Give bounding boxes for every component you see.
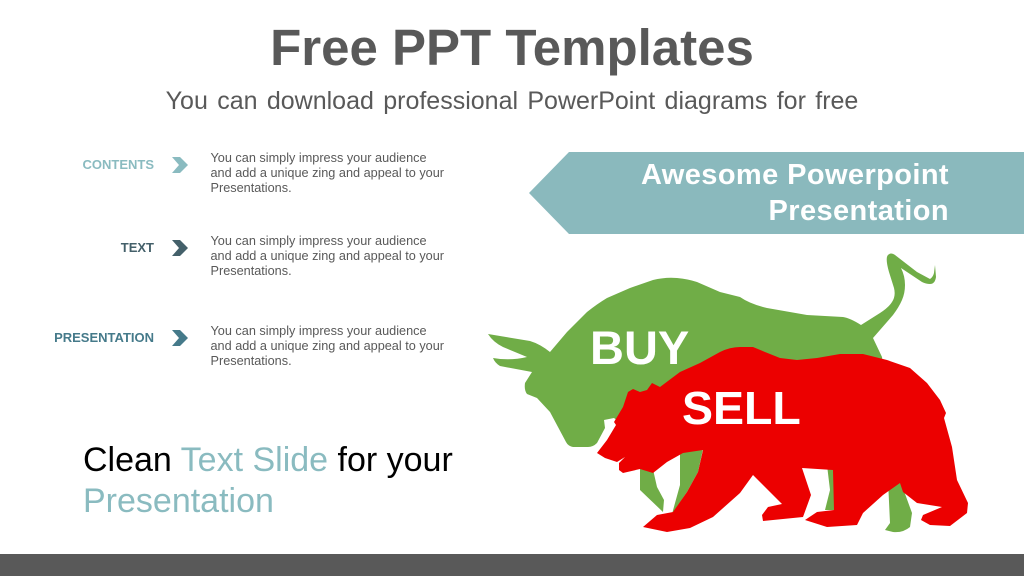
- item 1 text: You can simply impress your audience: [210, 150, 427, 164]
- banner text: [641, 158, 949, 226]
- title: Free PPT Templates: [270, 18, 754, 76]
- label: buy: BUY: [590, 321, 689, 374]
- bear silhouette: [597, 347, 968, 532]
- bull hind leg middle: [825, 465, 835, 510]
- tagline: [83, 441, 453, 520]
- tagline: Presentation: [83, 482, 274, 520]
- item 3 text: [210, 324, 444, 368]
- icon: arrow 2: [172, 240, 188, 256]
- item 1 text: and add a unique zing and appeal to your: [210, 166, 444, 180]
- banner arrow: [529, 152, 1024, 234]
- icon: arrow 3: [172, 330, 188, 346]
- label: sell: SELL: [682, 382, 801, 434]
- icon: arrow 1: [172, 157, 188, 173]
- tagline: Clean Text Slide for your: [83, 441, 453, 479]
- bull foreleg left: [640, 465, 664, 512]
- item 2 text: You can simply impress your audience: [210, 234, 427, 248]
- item 3 text: Presentations.: [210, 354, 292, 368]
- item 3 label: PRESENTATION: [54, 330, 154, 345]
- bull foreleg right: [672, 449, 703, 514]
- item 1 text: [210, 150, 444, 194]
- subtitle: You can download professional PowerPoint diagrams for free: [166, 86, 858, 114]
- item 1 text: Presentations.: [210, 180, 292, 194]
- banner text: Presentation: [769, 194, 949, 226]
- item 1 label: CONTENTS: [82, 157, 154, 172]
- item 3 text: and add a unique zing and appeal to your: [210, 338, 444, 352]
- item 2 text: Presentations.: [210, 264, 292, 278]
- footer bar: [0, 554, 1024, 576]
- item 2 label: TEXT: [121, 240, 154, 255]
- banner text: Awesome Powerpoint: [641, 158, 949, 190]
- item 2 text: and add a unique zing and appeal to your: [210, 248, 444, 262]
- bull hind leg right: [885, 480, 912, 532]
- item 3 text: You can simply impress your audience: [210, 324, 427, 338]
- item 2 text: [210, 234, 444, 278]
- bull silhouette: [488, 254, 936, 532]
